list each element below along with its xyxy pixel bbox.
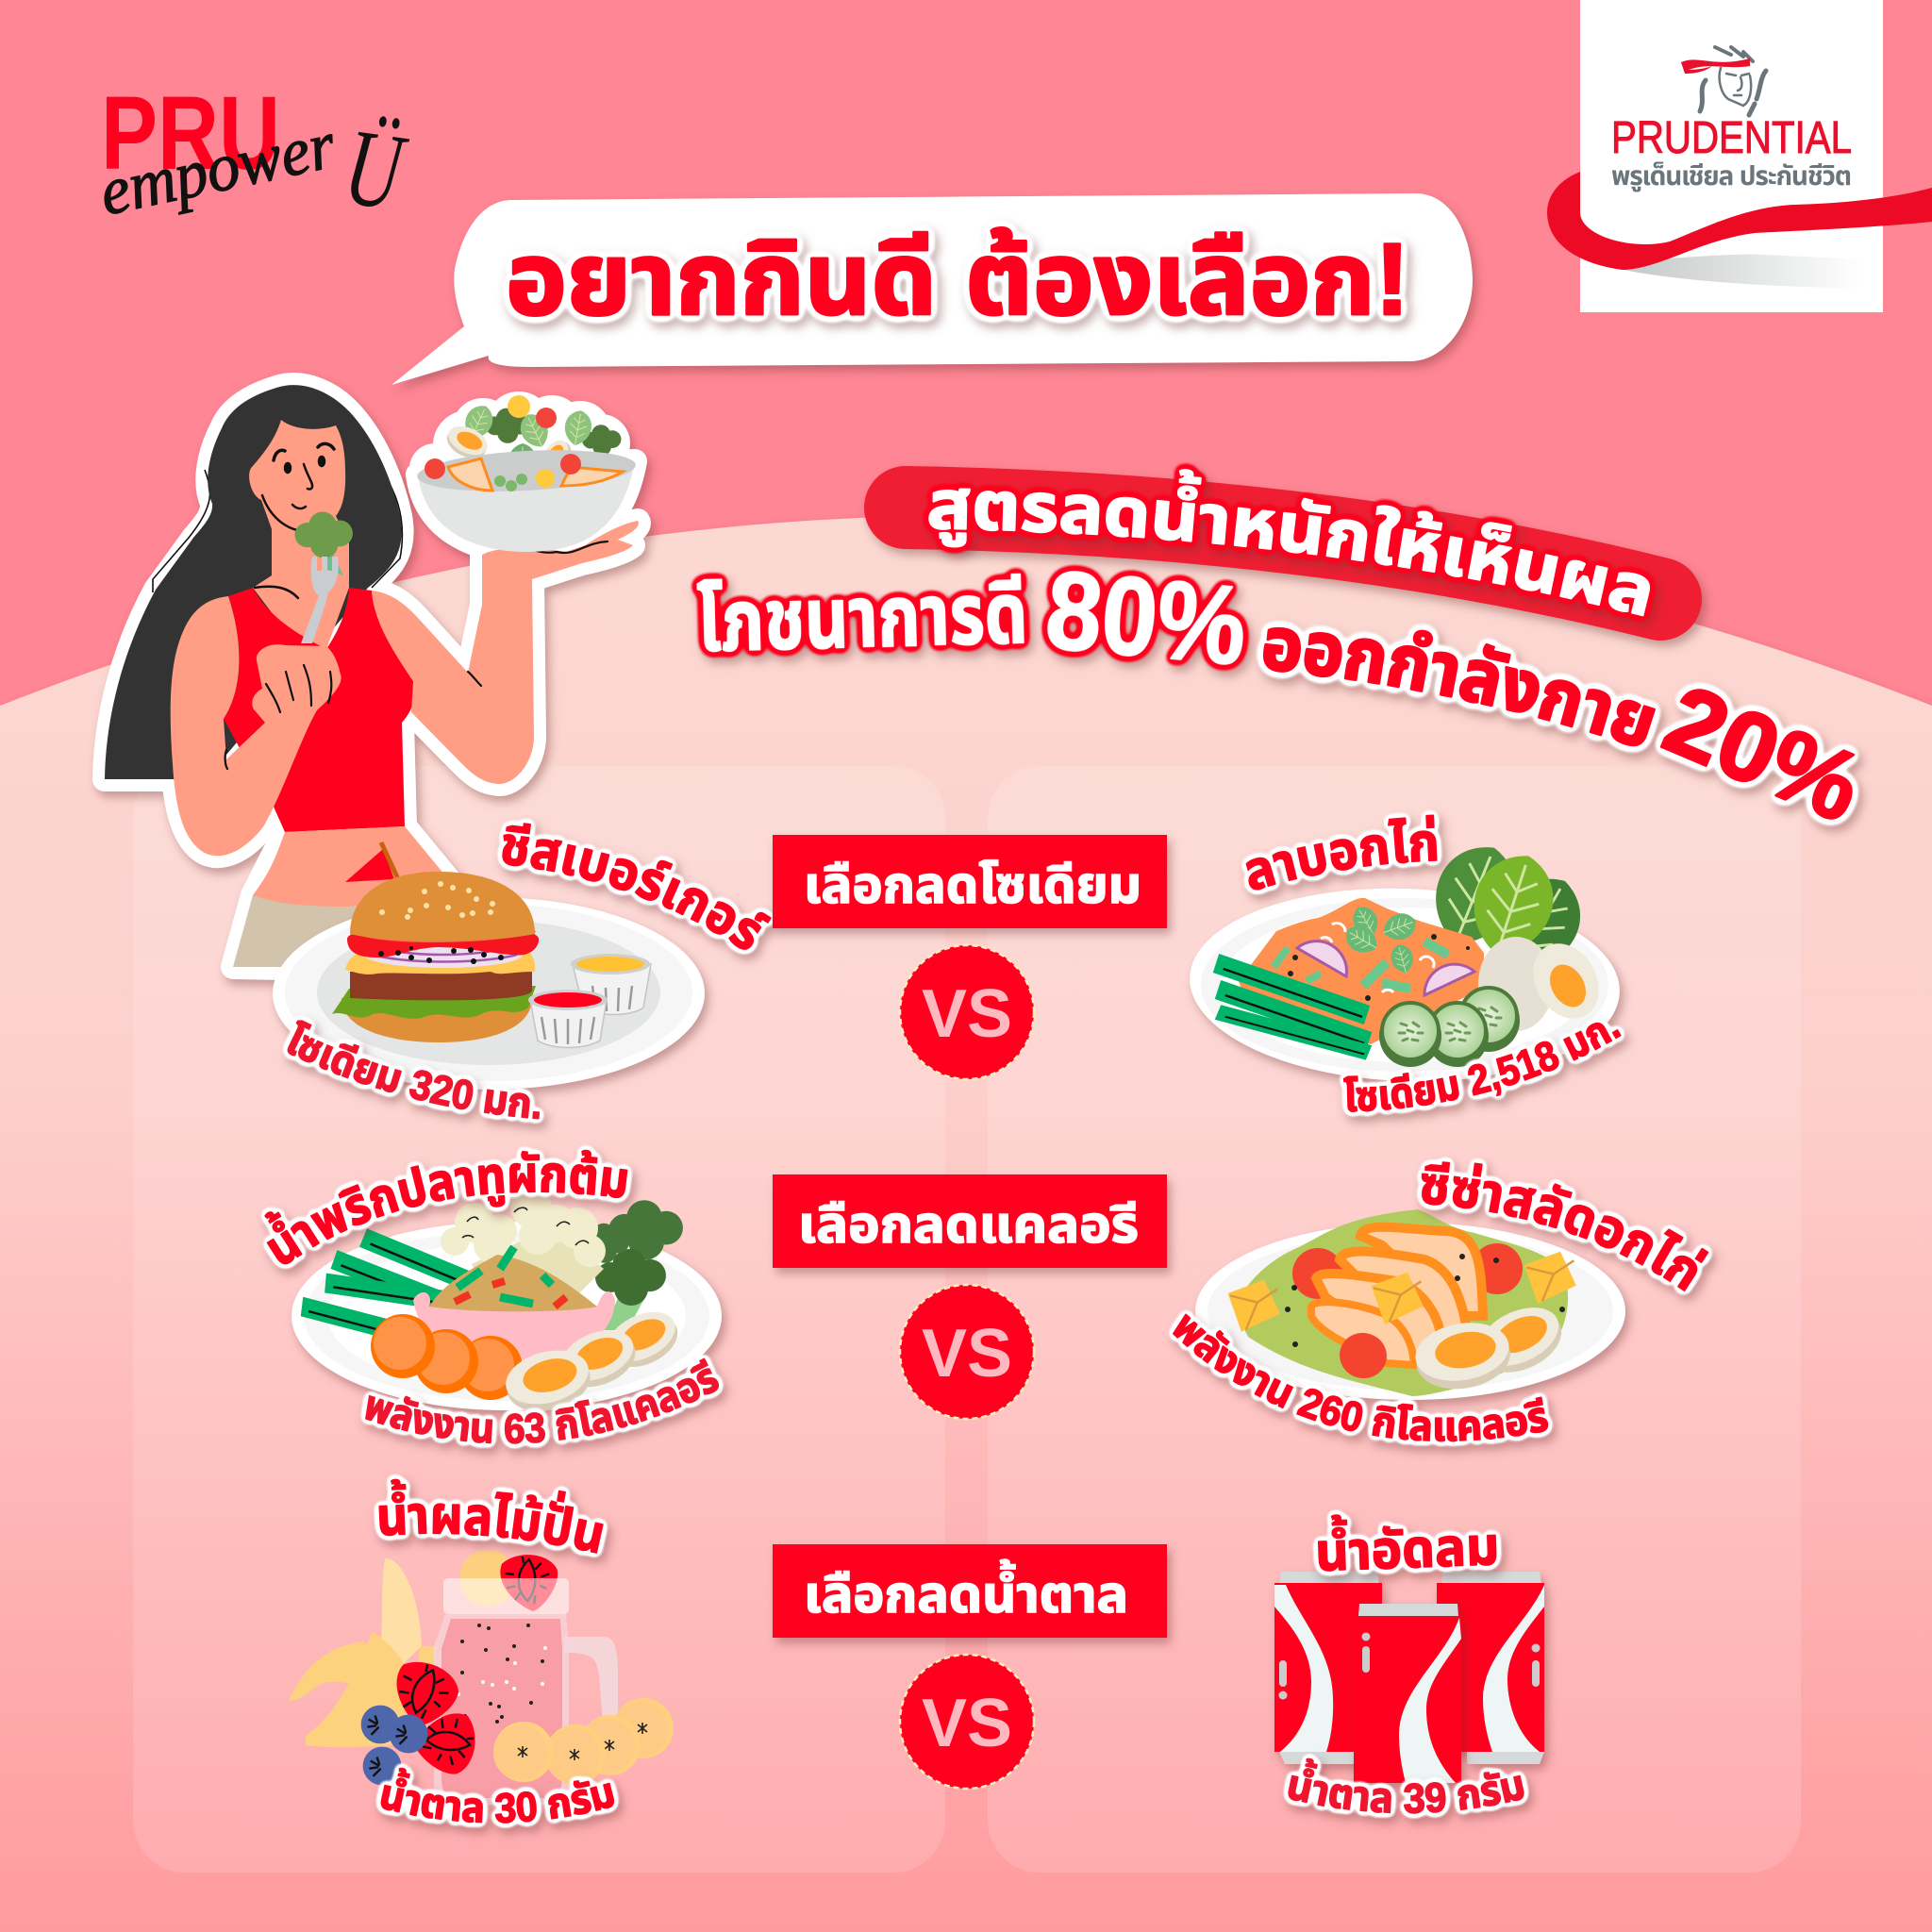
logo: PRU empower U: PRU [101, 75, 280, 192]
pants [233, 895, 415, 967]
exercise 20%: ออกกำลังกาย [1256, 620, 1670, 763]
label: larb: ลาบอกไก่ [1241, 809, 1451, 906]
larb toppings [1274, 902, 1474, 1001]
plate [273, 897, 705, 1090]
carrot slices [371, 1314, 523, 1400]
hair [105, 385, 402, 779]
Thai wordmark: พรูเด็นเชียล ประกันชีวิต [1611, 161, 1852, 192]
nutrition 80%: 80% [1041, 547, 1251, 689]
fruit behind jar [459, 1544, 568, 1618]
exercise 20% [1256, 620, 1868, 836]
jar [434, 1578, 618, 1805]
greens [1419, 833, 1597, 985]
speech bubble [391, 193, 1473, 385]
cucumber slices [1379, 988, 1520, 1067]
nutrition 80% [696, 547, 1251, 689]
icon: Prudence head [1681, 47, 1766, 115]
larb [1239, 898, 1484, 1044]
banner text: สูตรลดน้ำหนักให้เห็นผล [923, 462, 1664, 631]
exercise 20%: 20% [1654, 682, 1868, 836]
label box [773, 1544, 1167, 1638]
title: อยากกินดี ต้องเลือก! [506, 222, 1409, 336]
egg slices [500, 1302, 686, 1420]
dressing [1234, 1209, 1568, 1396]
label box [773, 1174, 1167, 1268]
stray hair lines [153, 470, 402, 592]
scallions [1216, 963, 1369, 1054]
banana slices [493, 1698, 674, 1785]
label: caesar salad: ซีซ่าสลัดอกไก่ [1416, 1157, 1721, 1305]
red banner [906, 508, 1660, 599]
panel: right column [988, 766, 1801, 1873]
label: sugar 39 g: น้ำตาล 39 กรัม [1283, 1753, 1537, 1828]
belly [253, 826, 472, 943]
cauliflower [441, 1187, 606, 1297]
food: cheeseburger plate [272, 819, 781, 1134]
ribbon [1547, 172, 1932, 270]
left can [1274, 1572, 1382, 1764]
vs badge: VS [922, 976, 1012, 1052]
label: sodium 320 mg: โซเดียม 320 มก. [282, 1017, 552, 1134]
nutrition 80%: โภชนาการดี [696, 567, 1028, 670]
food: larb plate [1189, 809, 1633, 1126]
label: cheeseburger: ชีสเบอร์เกอร์ [496, 819, 781, 965]
plate [1195, 1223, 1625, 1400]
vs badge [900, 1655, 1034, 1789]
label: fruit smoothie: น้ำผลไม้ปั่น [374, 1474, 615, 1568]
berries [361, 1662, 484, 1785]
sauce cups [528, 954, 651, 1047]
logo: PRU empower U [93, 75, 414, 235]
broccoli [580, 1200, 683, 1330]
arm lines [225, 541, 608, 769]
right can [1437, 1572, 1544, 1764]
food: soda cans [1274, 1509, 1553, 1828]
label: 260 kcal: พลังงาน 260 กิโลแคลอรี [1168, 1309, 1560, 1457]
white sticker outline [105, 385, 639, 972]
food: smoothie [289, 1474, 674, 1838]
food: nam phrik plate [260, 1145, 732, 1458]
logo: PRU empower U: Ü [338, 107, 414, 235]
face details [255, 443, 334, 598]
vs badge [900, 1285, 1034, 1419]
tank top [224, 588, 415, 832]
bowl of salad [416, 395, 637, 552]
label box [773, 835, 1167, 928]
arm holding fork [171, 596, 341, 856]
ribbon shadow [1618, 255, 1863, 288]
compare: reduce sodium [773, 835, 1167, 1079]
tomatoes [1292, 1243, 1523, 1299]
logo: Prudential [1547, 0, 1932, 312]
label: 63 kcal: พลังงาน 63 กิโลแคลอรี [360, 1353, 732, 1458]
croutons [1228, 1252, 1576, 1332]
label: nam phrik: น้ำพริกปลาทูผักต้ม [260, 1145, 641, 1279]
wordmark: PRUDENTIAL [1611, 113, 1852, 163]
panel: left column [133, 766, 945, 1873]
plate [291, 1222, 722, 1410]
vs badge [900, 945, 1034, 1079]
eggs [1411, 1296, 1571, 1396]
scallions [302, 1238, 519, 1359]
compare: reduce calories [773, 1174, 1167, 1419]
headline: weight loss formula [690, 462, 1868, 836]
label: sodium 2,518 mg: โซเดียม 2,518 มก. [1339, 1019, 1633, 1126]
fork with broccoli [294, 511, 353, 643]
vs badge: VS [922, 1316, 1012, 1391]
label text: เลือกลดแคลอรี [798, 1197, 1139, 1254]
burger [332, 872, 539, 1042]
woman sticker [105, 385, 639, 972]
neck and face [249, 420, 349, 649]
label text: เลือกลดโซเดียม [804, 858, 1141, 914]
chicken [1311, 1227, 1483, 1365]
pepper [1285, 1254, 1565, 1347]
food: caesar salad plate [1168, 1157, 1721, 1457]
banana [289, 1558, 436, 1747]
tomato front [1335, 1327, 1391, 1384]
pink bowl with chili dip [413, 1247, 615, 1360]
label text: เลือกลดน้ำตาล [804, 1559, 1128, 1624]
label: soda: น้ำอัดลม [1312, 1509, 1509, 1587]
vs badge: VS [922, 1686, 1012, 1761]
label: sugar 30 g: น้ำตาล 30 กรัม [375, 1762, 626, 1838]
boiled egg [1478, 932, 1612, 1031]
middle can [1354, 1604, 1461, 1783]
plate [1187, 881, 1623, 1089]
logo: PRU empower U: empower [93, 107, 342, 230]
flag pick [345, 842, 405, 893]
compare: reduce sugar [773, 1544, 1167, 1789]
arm holding bowl [372, 521, 639, 784]
